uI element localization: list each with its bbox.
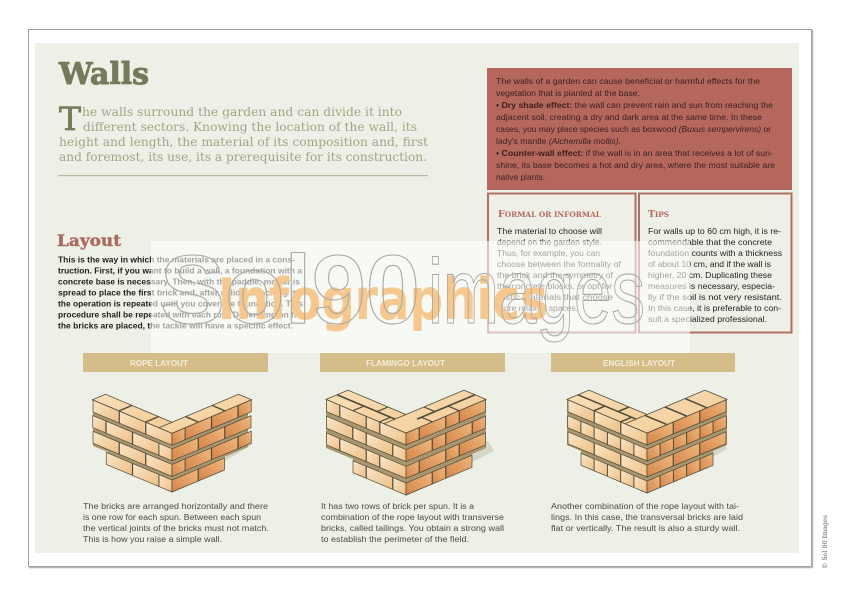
tips text: sult a specialized professional. [648, 314, 767, 324]
caption: english layout: Another combination of the rope layout with tai- [551, 501, 739, 511]
panel: effects: adjacent soil, creating a dry and dark area at the same time. In these [496, 112, 762, 122]
caption: english layout: flat or vertically. The result is also a sturdy wall. [551, 523, 740, 533]
formal text: depend on the garden style. [497, 237, 602, 247]
formal text: more relaxed spaces. [497, 303, 578, 313]
illustration: flamingo layout wall [326, 390, 494, 496]
tips text [648, 226, 782, 324]
caption: english layout: lings. In this case, the transversal bricks are laid [551, 512, 743, 522]
background panel [35, 43, 799, 553]
formal text: choose between the formality of [497, 259, 622, 269]
label bar: rope layout: ROPE LAYOUT [130, 358, 189, 368]
panel: effects: native plants. [496, 172, 545, 182]
layout body text: truction. First, if you want to build a wall, a foundation with a [58, 266, 302, 276]
intro text: height and length, the material of its composition and, first [59, 134, 428, 149]
formal text [497, 226, 622, 313]
label bar: flamingo layout: FLAMINGO LAYOUT [366, 358, 446, 368]
tips text: measures is necessary, especia- [648, 281, 775, 291]
caption: rope layout: This is how you raise a simple wall. [83, 534, 222, 544]
heading: tips: TIPS [648, 210, 669, 220]
credit: © Sol 90 Images [821, 515, 829, 569]
formal text: The material to choose will [497, 226, 602, 236]
panel: effects: lady's mantle (Alchemilla mollis). [496, 136, 621, 146]
label bar: english layout: ENGLISH LAYOUT [603, 358, 676, 368]
layout body text: concrete base is necessary. Then, with the paddle, mortar is [58, 276, 300, 286]
tips text: lly if the soil is not very resistant. [648, 292, 782, 302]
tips text: commendable that the concrete [648, 237, 772, 247]
panel: effects: shine, its base becomes a hot and dry area, where the most suitable are [496, 160, 775, 170]
formal text: rustic materials that choose [497, 292, 613, 302]
label bar: english layout [551, 353, 735, 372]
layout body text [58, 254, 308, 330]
caption: flamingo layout: bricks, called tailings. You obtain a strong wall [321, 523, 504, 533]
watermark: Infographics [218, 267, 548, 333]
caption: rope layout: The bricks are arranged horizontally and there [83, 501, 268, 511]
intro text: different sectors. Knowing the location of the wall, its [83, 119, 417, 134]
panel: effects: vegetation that is planted at the base. [496, 88, 640, 98]
caption: rope layout: the vertical joints of the bricks must not match. [83, 523, 269, 533]
panel: effects [487, 68, 792, 190]
tips text: For walls up to 60 cm high, it is re- [648, 226, 781, 236]
illustration: english layout wall [567, 390, 727, 494]
watermark [151, 235, 690, 353]
panel: effects: cases, you may place species such as boxwood (Buxus sempervirens) or [496, 124, 771, 134]
layout body text: the operation is repeated until you cover the foundation. This [58, 298, 303, 308]
panel: tips [639, 194, 792, 332]
formal text: the concrete blocks, or opt for [497, 281, 612, 291]
watermark: images [428, 241, 645, 343]
layout body text: This is the way in which the materials are placed in a cons- [58, 254, 295, 264]
heading: layout: Layout [57, 231, 122, 250]
panel: effects: • Dry shade effect: the wall can prevent rain and sun from reaching the [496, 100, 773, 110]
caption: flamingo layout: combination of the rope layout with transverse [321, 512, 504, 522]
drop cap: T [59, 100, 82, 138]
layout body text: procedure shall be repeated with each row. Depending on how [58, 310, 308, 320]
caption: flamingo layout: to establish the perimeter of the field. [321, 534, 469, 544]
intro text: and foremost, its use, its a prerequisite for its construction. [59, 149, 427, 164]
label bar: flamingo layout [320, 353, 505, 372]
label bar: rope layout [83, 353, 268, 372]
panel: formal or informal [488, 194, 636, 332]
layout body text: spread to place the first brick and, after solidly attaching it, [58, 288, 298, 298]
layout body text: the bricks are placed, the tackle will have a specific effect. [58, 320, 293, 330]
heading: formal or informal: FORMAL OR INFORMAL [498, 210, 601, 220]
watermark: Sol90 [160, 235, 420, 344]
illustration: rope layout wall [92, 394, 253, 493]
tips text: foundation counts with a thickness [648, 248, 782, 258]
caption: flamingo layout: It has two rows of brick per spun. It is a [321, 501, 474, 511]
caption: rope layout: is one row for each spun. Between each spun [83, 512, 261, 522]
intro text [59, 100, 428, 164]
tips text: In this case, it is preferable to con- [648, 303, 781, 313]
intro text: he walls surround the garden and can divide it into [82, 104, 402, 119]
formal text: Thus, for example, you can [497, 248, 600, 258]
caption: english layout [551, 501, 743, 533]
panel: effects: The walls of a garden can cause beneficial or harmful effects for the [496, 76, 760, 86]
panel: effects: • Counter-wall effect: if the wall is in an area that receives a lot of sun- [496, 148, 773, 158]
caption: rope layout [83, 501, 269, 544]
tips text: higher, 20 cm. Duplicating these [648, 270, 772, 280]
tips text: of about 10 cm, and if the wall is [648, 259, 771, 269]
caption: flamingo layout [321, 501, 504, 544]
formal text: the brick and the symmetry of [497, 270, 614, 280]
title: Walls [58, 57, 149, 92]
